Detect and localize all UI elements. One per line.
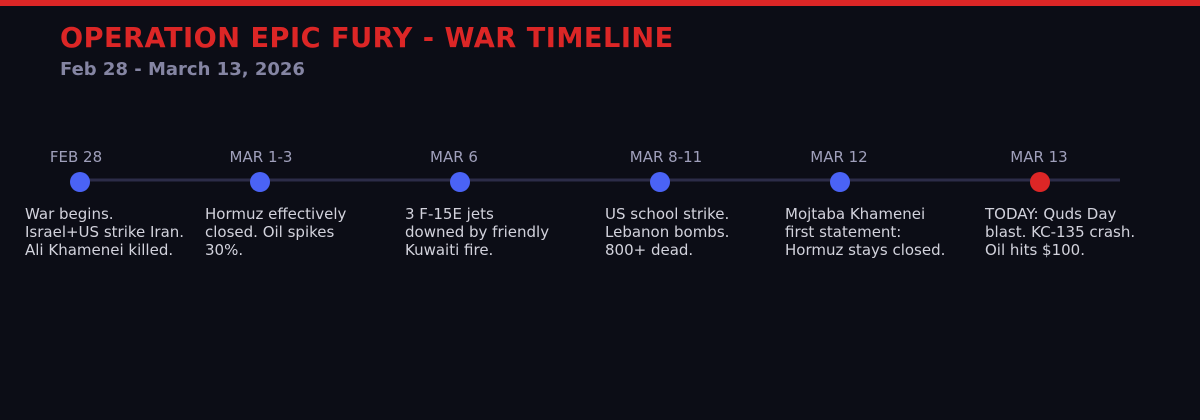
event: Mar 13: blast. KC-135 crash.	[985, 223, 1135, 241]
event: Feb 28: FEB 28	[50, 148, 102, 166]
event: Mar 8-11: US school strike.	[605, 205, 729, 223]
event: Feb 28	[25, 148, 184, 259]
event: Feb 28: Ali Khamenei killed.	[25, 241, 173, 259]
event: Mar 1-3: closed. Oil spikes	[205, 223, 334, 241]
subtitle: Feb 28 - March 13, 2026	[60, 59, 305, 80]
event: Mar 8-11	[605, 148, 729, 259]
event: Mar 6: Kuwaiti fire.	[405, 241, 493, 259]
event: Mar 1-3	[205, 148, 346, 259]
event: Mar 8-11: Lebanon bombs.	[605, 223, 729, 241]
timeline line	[80, 178, 1120, 182]
event: Mar 6: downed by friendly	[405, 223, 549, 241]
event: Feb 28: Israel+US strike Iran.	[25, 223, 184, 241]
event: Feb 28: War begins.	[25, 205, 114, 223]
event: Mar 1-3: Hormuz effectively	[205, 205, 346, 223]
event: Mar 12: Mojtaba Khamenei	[785, 205, 925, 223]
event: Mar 1-3: MAR 1-3	[230, 148, 292, 166]
title: OPERATION EPIC FURY - WAR TIMELINE	[60, 23, 674, 54]
event: Mar 13: Oil hits $100.	[985, 241, 1085, 259]
event: Mar 6: 3 F-15E jets	[405, 205, 494, 223]
event: Mar 13: MAR 13	[1010, 148, 1068, 166]
event: Mar 12: Hormuz stays closed.	[785, 241, 945, 259]
event: Mar 12	[785, 148, 945, 259]
event: Mar 12: first statement:	[785, 223, 901, 241]
event: Mar 13	[984, 148, 1135, 259]
event: Mar 8-11: 800+ dead.	[605, 241, 693, 259]
event: Mar 13: TODAY: Quds Day	[984, 205, 1117, 223]
event: Mar 12: MAR 12	[810, 148, 868, 166]
event: Mar 6: MAR 6	[430, 148, 478, 166]
event: Mar 6	[405, 148, 549, 259]
event: Mar 1-3: 30%.	[205, 241, 243, 259]
event: Mar 8-11: MAR 8-11	[630, 148, 702, 166]
